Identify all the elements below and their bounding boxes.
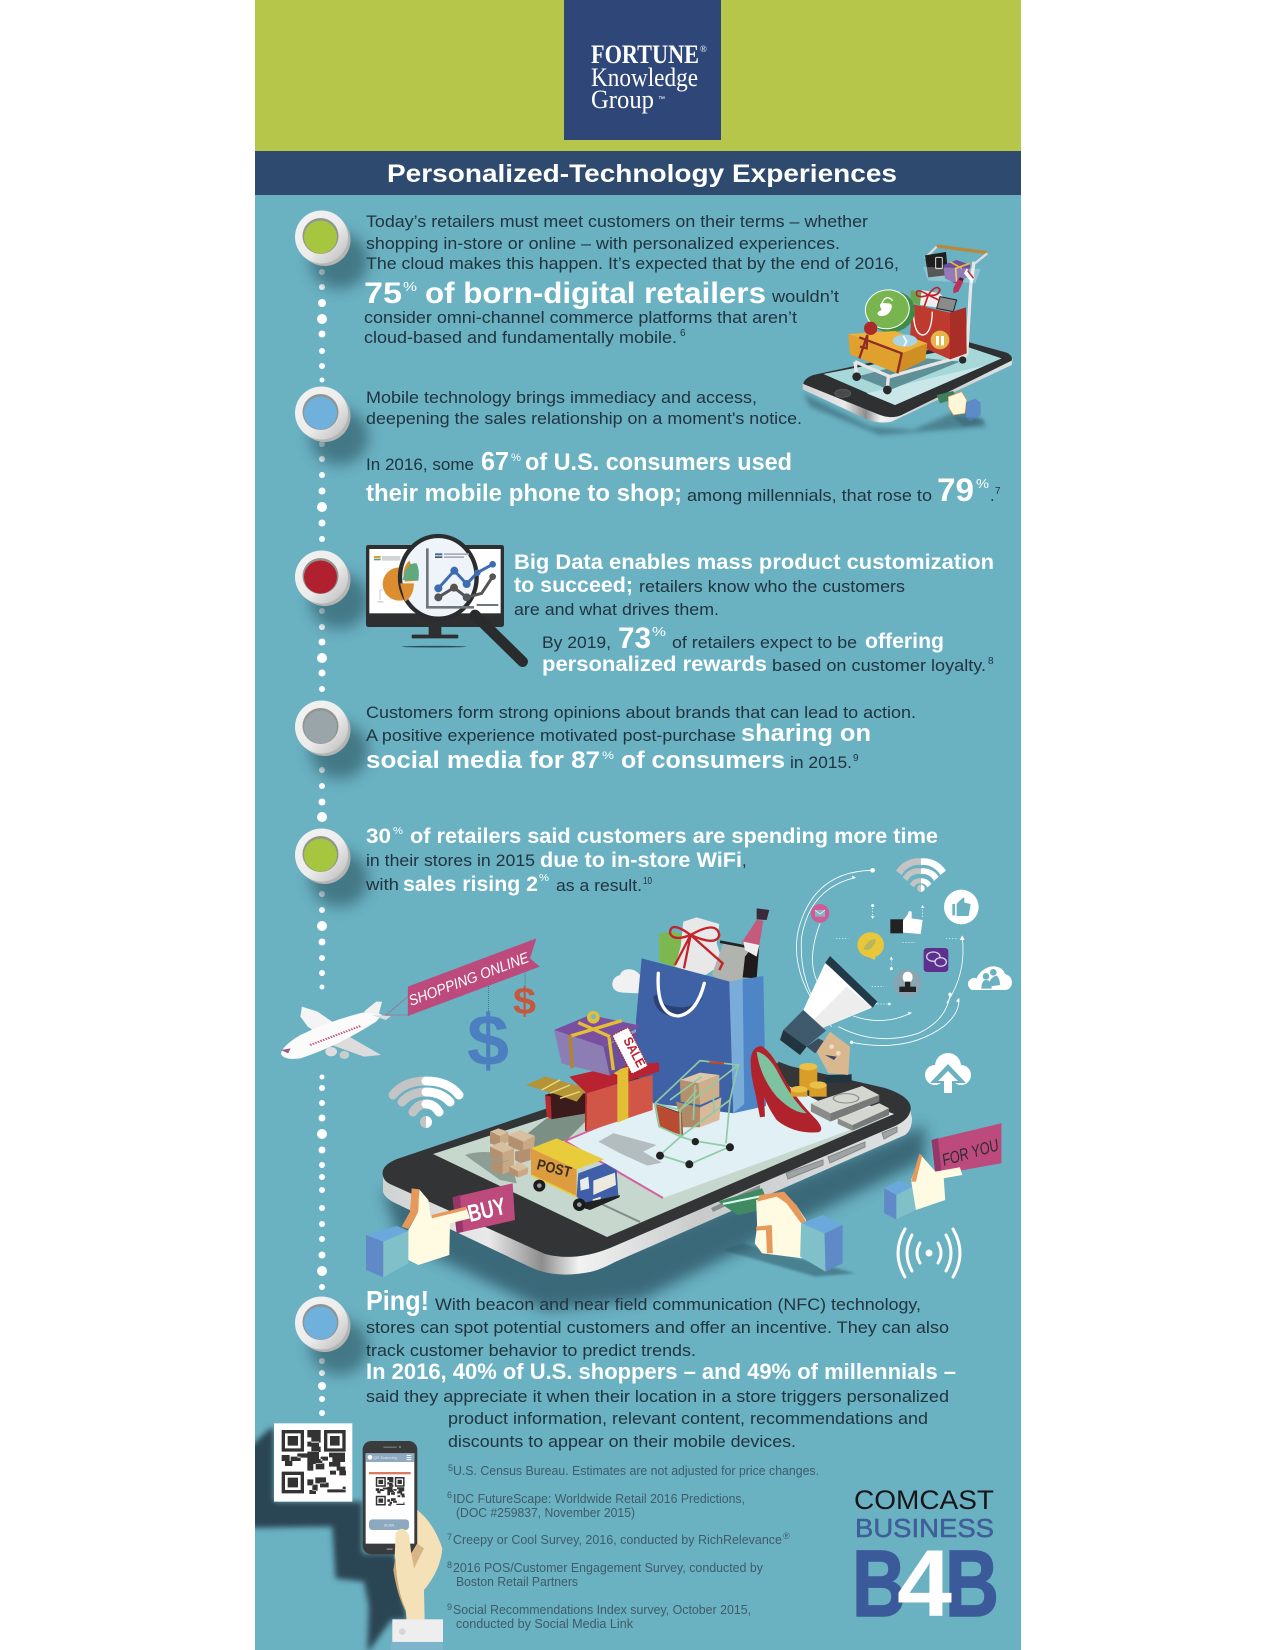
illustration: QR code scan <box>255 1423 443 1650</box>
text block: wifi: as a result. <box>556 877 642 895</box>
text block: big data: % <box>652 624 667 639</box>
footnotes: ® <box>783 1531 790 1541</box>
text block: social sharing: social media for 87 <box>366 747 600 774</box>
icon: upload cloud <box>925 1053 971 1095</box>
text block: ping: product information, relevant content, recommendations and <box>448 1410 928 1428</box>
illustration: boxes, truck and hand with buy sign: BUY <box>465 1193 508 1228</box>
text block: omni-channel: wouldn’t <box>771 288 839 306</box>
text block: wifi: sales rising 2 <box>403 873 538 896</box>
title band <box>255 151 1021 195</box>
stat: 67 percent and 79 percent: % <box>511 452 521 464</box>
stat: 67 percent and 79 percent: In 2016, some <box>366 456 474 474</box>
illustration: shopping cart on phone <box>803 246 1013 435</box>
text block: omni-channel: 75 <box>364 277 402 310</box>
illustration: phone shadow and base <box>383 1050 925 1310</box>
text block: social sharing: A positive experience motivated post-purchase <box>366 727 736 745</box>
logo: Fortune Knowledge Group: Group <box>591 85 654 114</box>
text block: social sharing: Customers form strong opinions about brands that can lead to action. <box>366 704 916 722</box>
text block: big data: retailers know who the customers <box>639 578 905 596</box>
text block: wifi <box>365 825 938 896</box>
text block: big data: based on customer loyalty. <box>772 657 986 675</box>
text block: big data: offering <box>865 630 944 653</box>
stat: 67 percent and 79 percent: 79 <box>937 472 974 508</box>
logo: Fortune Knowledge Group: FORTUNE <box>591 40 699 69</box>
text block: wifi: of retailers said customers are spending more time <box>410 825 938 848</box>
text block: omni-channel: 6 <box>680 328 686 339</box>
text block: social sharing <box>366 704 916 774</box>
footnotes: 8 <box>447 1560 452 1570</box>
text block: omni-channel <box>364 213 899 347</box>
panel: teal background <box>255 195 1021 1650</box>
footnotes: U.S. Census Bureau. Estimates are not adjusted for price changes. <box>453 1464 819 1478</box>
text block: big data: are and what drives them. <box>514 601 719 619</box>
text block: big data: to succeed; <box>514 574 633 597</box>
header: green banner <box>255 0 1021 151</box>
footnotes: conducted by Social Media Link <box>456 1617 634 1631</box>
button: green 5 <box>295 828 368 907</box>
text block: big data <box>514 551 994 676</box>
icon: red dollar sign: $ <box>513 981 536 1023</box>
illustration: boxes, truck and hand with buy sign: POST <box>535 1156 573 1181</box>
button: blue 6 <box>295 1296 368 1375</box>
illustration: centre shopping objects: SALE <box>620 1034 649 1070</box>
stat: 67 percent and 79 percent: 67 <box>481 446 509 476</box>
text block: wifi: in their stores in 2015 <box>366 852 535 870</box>
footnotes: 2016 POS/Customer Engagement Survey, conducted by <box>453 1561 764 1575</box>
logo: Comcast Business B4B: BUSINESS <box>855 1515 994 1543</box>
footnotes: IDC FutureScape: Worldwide Retail 2016 Predictions, <box>453 1492 745 1506</box>
icon: blue dollar sign: $ <box>467 1001 509 1081</box>
stat: 67 percent and 79 percent: 7 <box>995 486 1001 497</box>
illustration: megaphone and social icons <box>780 858 1012 1083</box>
text block: ping: said they appreciate it when their location in a store triggers personalized <box>366 1388 949 1406</box>
text block: ping: Ping! <box>366 1285 429 1316</box>
logo: Fortune Knowledge Group: ® <box>700 44 707 54</box>
footnotes: (DOC #259837, November 2015) <box>456 1506 635 1520</box>
footnotes <box>447 1463 819 1631</box>
text block: social sharing: 9 <box>853 753 859 764</box>
button: red 3 <box>295 550 368 629</box>
illustration: card hand <box>718 1188 855 1277</box>
icon: wireless signal <box>898 1229 960 1277</box>
stat: 67 percent and 79 percent: . <box>990 487 995 505</box>
footnotes: Social Recommendations Index survey, October 2015, <box>453 1603 751 1617</box>
text block: social sharing: of consumers <box>621 747 785 774</box>
footnotes: Boston Retail Partners <box>456 1575 578 1589</box>
text block: ping <box>366 1285 956 1451</box>
icon: airplane with banner <box>281 938 540 1059</box>
text block: ping: With beacon and near field communication (NFC) technology, <box>435 1296 921 1314</box>
stat: 67 percent and 79 percent: % <box>976 476 989 491</box>
logo: Fortune Knowledge Group: ™ <box>658 96 665 103</box>
text block: mobile immediacy <box>366 389 802 428</box>
text block: omni-channel: % <box>403 279 418 294</box>
illustration: boxes, truck and hand with buy sign <box>366 1128 620 1277</box>
text block: wifi: , <box>742 852 747 870</box>
text block: ping: track customer behavior to predict trends. <box>366 1342 696 1360</box>
illustration: QR code scan: SCAN <box>384 1523 395 1527</box>
text block: mobile immediacy: Mobile technology brings immediacy and access, <box>366 389 757 407</box>
text block: omni-channel: consider omni-channel commerce platforms that aren’t <box>364 309 797 327</box>
text block: big data: personalized rewards <box>542 653 767 676</box>
text block: mobile immediacy: deepening the sales relationship on a moment's notice. <box>366 410 802 428</box>
text block: omni-channel: The cloud makes this happen. It’s expected that by the end of 2016, <box>366 255 899 273</box>
text block: wifi: 30 <box>366 825 391 848</box>
text block: wifi: due to in-store WiFi <box>540 849 742 872</box>
logo: Fortune Knowledge Group: Knowledge <box>591 63 698 92</box>
text block: big data: 8 <box>988 656 994 667</box>
illustration: QR code scan: QR Scanning <box>373 1455 397 1460</box>
logo: Comcast Business B4B: B <box>852 1531 906 1637</box>
text block: omni-channel: shopping in-store or online – with personalized experiences. <box>366 235 840 253</box>
button: green 1 <box>295 210 368 289</box>
stat: 67 percent and 79 percent: among millennials, that rose to <box>687 487 932 505</box>
text block: wifi: 10 <box>643 876 652 887</box>
logo: Comcast Business B4B <box>852 1485 999 1637</box>
logo: Fortune Knowledge Group <box>564 0 721 140</box>
text block: big data: of retailers expect to be <box>672 634 857 652</box>
text block: wifi: with <box>365 876 399 894</box>
text block: big data: 73 <box>618 622 651 655</box>
timeline dots <box>317 269 327 1416</box>
title band: Personalized-Technology Experiences <box>387 160 897 188</box>
illustration: for you hand and sign <box>884 1123 1001 1219</box>
text block: ping: In 2016, 40% of U.S. shoppers – and 49% of millennials – <box>366 1359 956 1384</box>
text block: social sharing: % <box>602 750 614 762</box>
text block: ping: stores can spot potential customers and offer an incentive. They can also <box>366 1319 949 1337</box>
icon: airplane with banner: SHOPPING ONLINE <box>406 949 532 1010</box>
footnotes: Creepy or Cool Survey, 2016, conducted by RichRelevance <box>453 1533 782 1547</box>
logo: Comcast Business B4B: B <box>945 1531 999 1637</box>
footnotes: 6 <box>447 1490 452 1500</box>
text block: ping: discounts to appear on their mobile devices. <box>448 1433 796 1451</box>
text block: omni-channel: Today’s retailers must meet customers on their terms – whether <box>366 213 869 231</box>
illustration: centre shopping objects <box>526 908 889 1168</box>
text block: omni-channel: of born-digital retailers <box>425 277 766 310</box>
stat: 67 percent and 79 percent: of U.S. consumers used <box>525 449 792 476</box>
logo: Comcast Business B4B: COMCAST <box>854 1485 994 1515</box>
button: blue 2 <box>295 386 368 465</box>
footnotes: 9 <box>447 1602 452 1612</box>
text block: big data: Big Data enables mass product customization <box>514 551 994 574</box>
text block: big data: By 2019, <box>542 634 611 652</box>
illustration: for you hand and sign: FOR YOU <box>940 1135 1001 1170</box>
icon: wifi left <box>393 1081 459 1128</box>
text block: wifi: % <box>539 873 549 884</box>
text block: social sharing: in 2015. <box>790 754 852 772</box>
button: gray 4 <box>295 700 368 779</box>
text block: omni-channel: cloud-based and fundamentally mobile. <box>364 329 677 347</box>
illustration: monitor and magnifying glass <box>366 536 523 662</box>
text block: social sharing: sharing on <box>741 720 871 747</box>
footnotes: 7 <box>447 1532 452 1542</box>
stat: 67 percent and 79 percent <box>366 446 1001 508</box>
stat: 67 percent and 79 percent: their mobile phone to shop; <box>366 480 682 507</box>
footnotes: 5 <box>448 1463 453 1473</box>
logo: Comcast Business B4B: 4 <box>897 1531 952 1637</box>
text block: wifi: % <box>393 826 403 837</box>
